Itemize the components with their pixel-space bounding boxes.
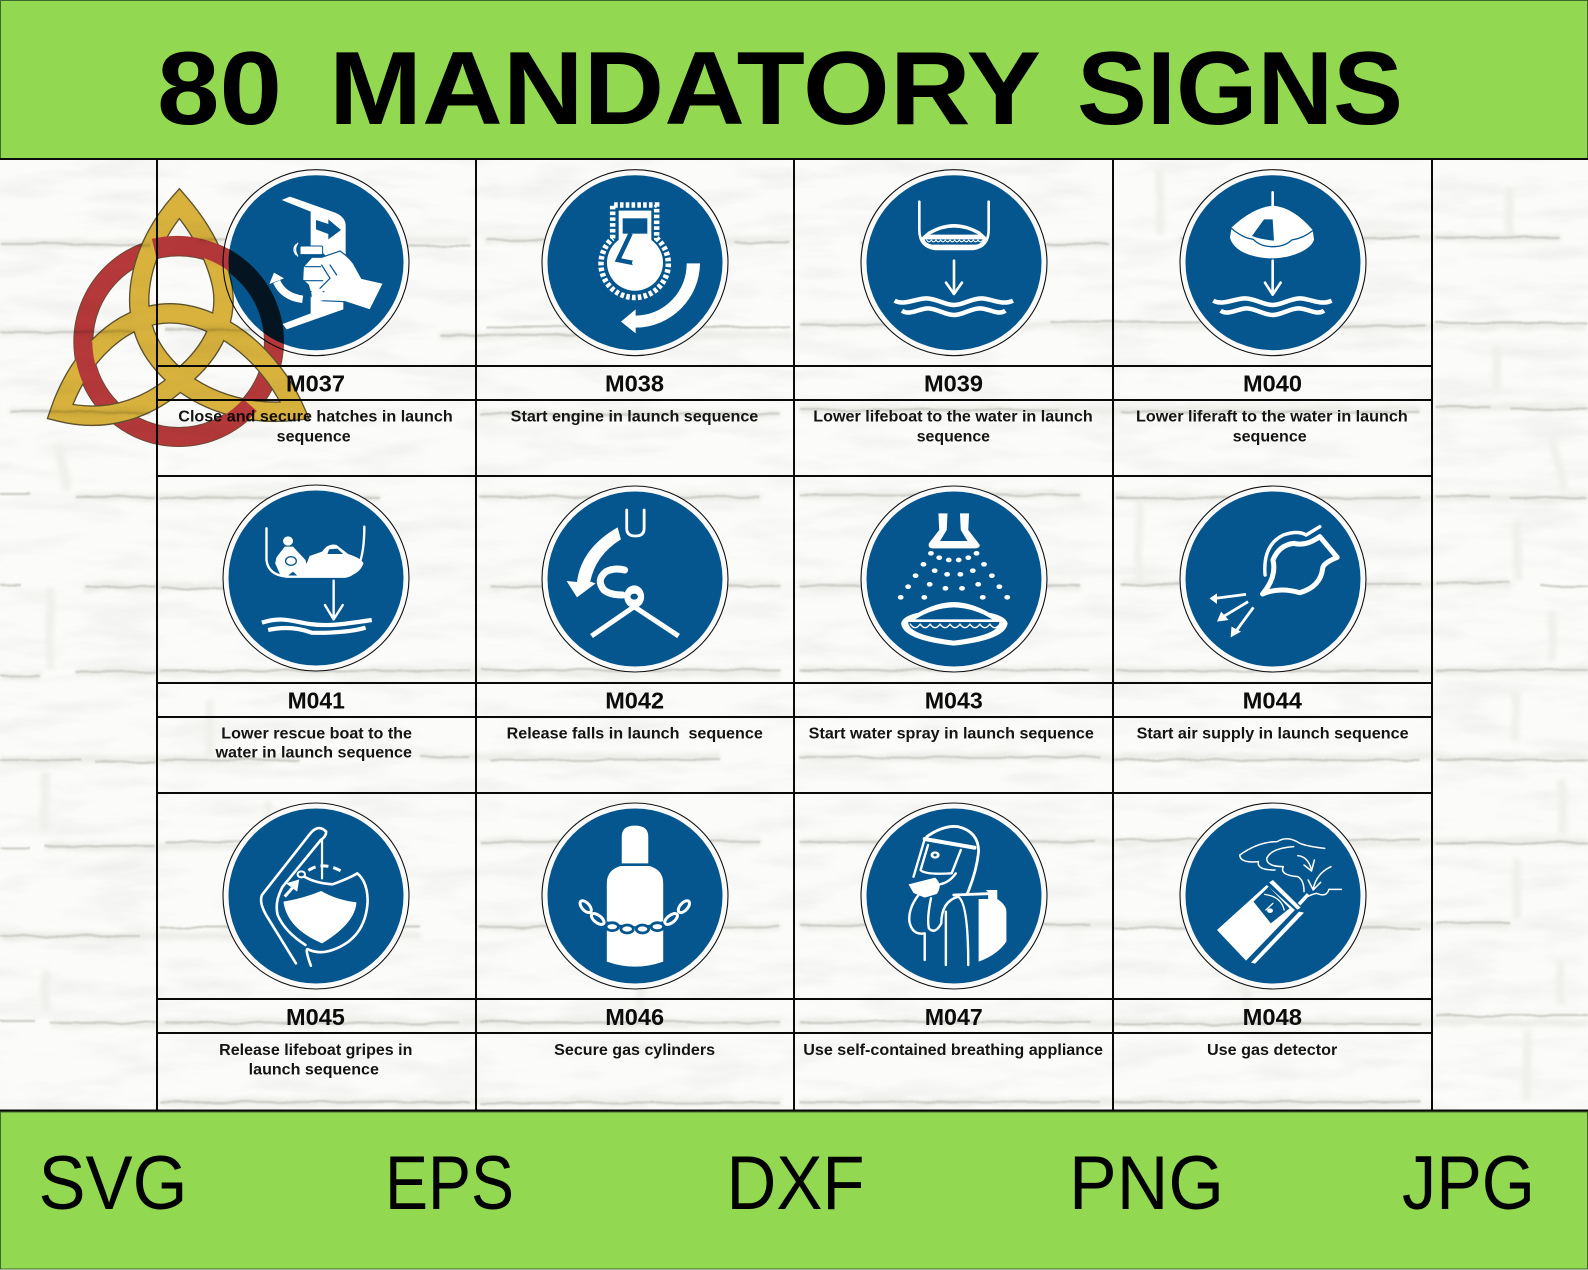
description — [214, 725, 412, 762]
description: Release lifeboat gripes in — [219, 1042, 412, 1059]
format label: SVG: SVG — [38, 1141, 188, 1226]
icon: release falls — [567, 510, 679, 636]
description: Lower liferaft to the water in launch — [1136, 409, 1408, 426]
icon: engine start — [601, 205, 700, 333]
code: M048 — [1243, 1004, 1302, 1030]
description — [1136, 409, 1408, 446]
bottom banner — [0, 1110, 1588, 1269]
code: M038 — [605, 371, 664, 397]
icon: lower rescue boat — [262, 527, 372, 633]
description: Start engine in launch sequence — [511, 409, 758, 426]
sign: M040 — [1136, 170, 1408, 446]
icon: release gripes — [261, 828, 368, 966]
format label: DXF: DXF — [726, 1141, 864, 1226]
icon: gas detector — [1217, 839, 1341, 964]
code: M042 — [605, 687, 664, 713]
sign: M039 — [813, 170, 1093, 446]
description: sequence — [277, 429, 351, 446]
format label: PNG: PNG — [1069, 1141, 1224, 1226]
code: M045 — [286, 1004, 345, 1030]
top banner — [0, 0, 1588, 160]
icon: lower lifeboat — [895, 202, 1013, 315]
sign: M044 — [1137, 486, 1409, 742]
sign: M048 — [1180, 803, 1366, 1059]
code: M047 — [925, 1004, 983, 1030]
description: Use gas detector — [1207, 1042, 1337, 1059]
icon: lower liferaft — [1213, 192, 1332, 315]
description: sequence — [917, 429, 990, 446]
icon: breathing apparatus — [909, 826, 1006, 965]
format label: EPS: EPS — [385, 1141, 514, 1226]
sign: M041 — [214, 485, 412, 762]
sign: M038 — [511, 170, 758, 426]
sign: M043 — [809, 486, 1094, 742]
sign: M042 — [507, 486, 763, 742]
description: Release falls in launch sequence — [507, 725, 763, 742]
description — [813, 409, 1093, 446]
description: Start air supply in launch sequence — [1137, 725, 1409, 742]
sign table grid — [157, 160, 1432, 1110]
code: M037 — [286, 371, 345, 397]
description — [178, 409, 453, 446]
sign: M045 — [219, 803, 412, 1078]
title: SIGNS — [1077, 31, 1403, 147]
description — [219, 1042, 412, 1078]
format label: JPG: JPG — [1402, 1141, 1535, 1226]
code: M041 — [288, 687, 345, 713]
sign: M037 — [178, 170, 453, 446]
code: M043 — [925, 687, 983, 713]
icon: air supply — [1210, 527, 1337, 637]
code: M044 — [1243, 687, 1302, 713]
title — [157, 31, 1403, 147]
description: launch sequence — [249, 1061, 379, 1078]
code: M039 — [924, 371, 983, 397]
sign: M046 — [542, 803, 728, 1059]
description: Close and secure hatches in launch — [178, 409, 453, 426]
description: Secure gas cylinders — [554, 1042, 715, 1059]
brick wall background — [0, 158, 1588, 1112]
code: M046 — [605, 1004, 664, 1030]
icon: gas cylinder with chain — [578, 826, 692, 967]
logo: triquetra with red ring — [60, 203, 295, 437]
code: M040 — [1243, 371, 1302, 397]
description: sequence — [1233, 429, 1307, 446]
description: Start water spray in launch sequence — [809, 725, 1094, 742]
sign: M047 — [803, 803, 1103, 1059]
title: 80 — [157, 31, 282, 147]
icon: hatch and hand — [269, 197, 383, 329]
title: MANDATORY — [329, 31, 1041, 147]
description: water in launch sequence — [214, 745, 412, 762]
description: Lower lifeboat to the water in launch — [813, 409, 1093, 426]
icon: water spray — [898, 513, 1010, 646]
description: Use self-contained breathing appliance — [803, 1042, 1103, 1059]
description: Lower rescue boat to the — [221, 725, 412, 742]
